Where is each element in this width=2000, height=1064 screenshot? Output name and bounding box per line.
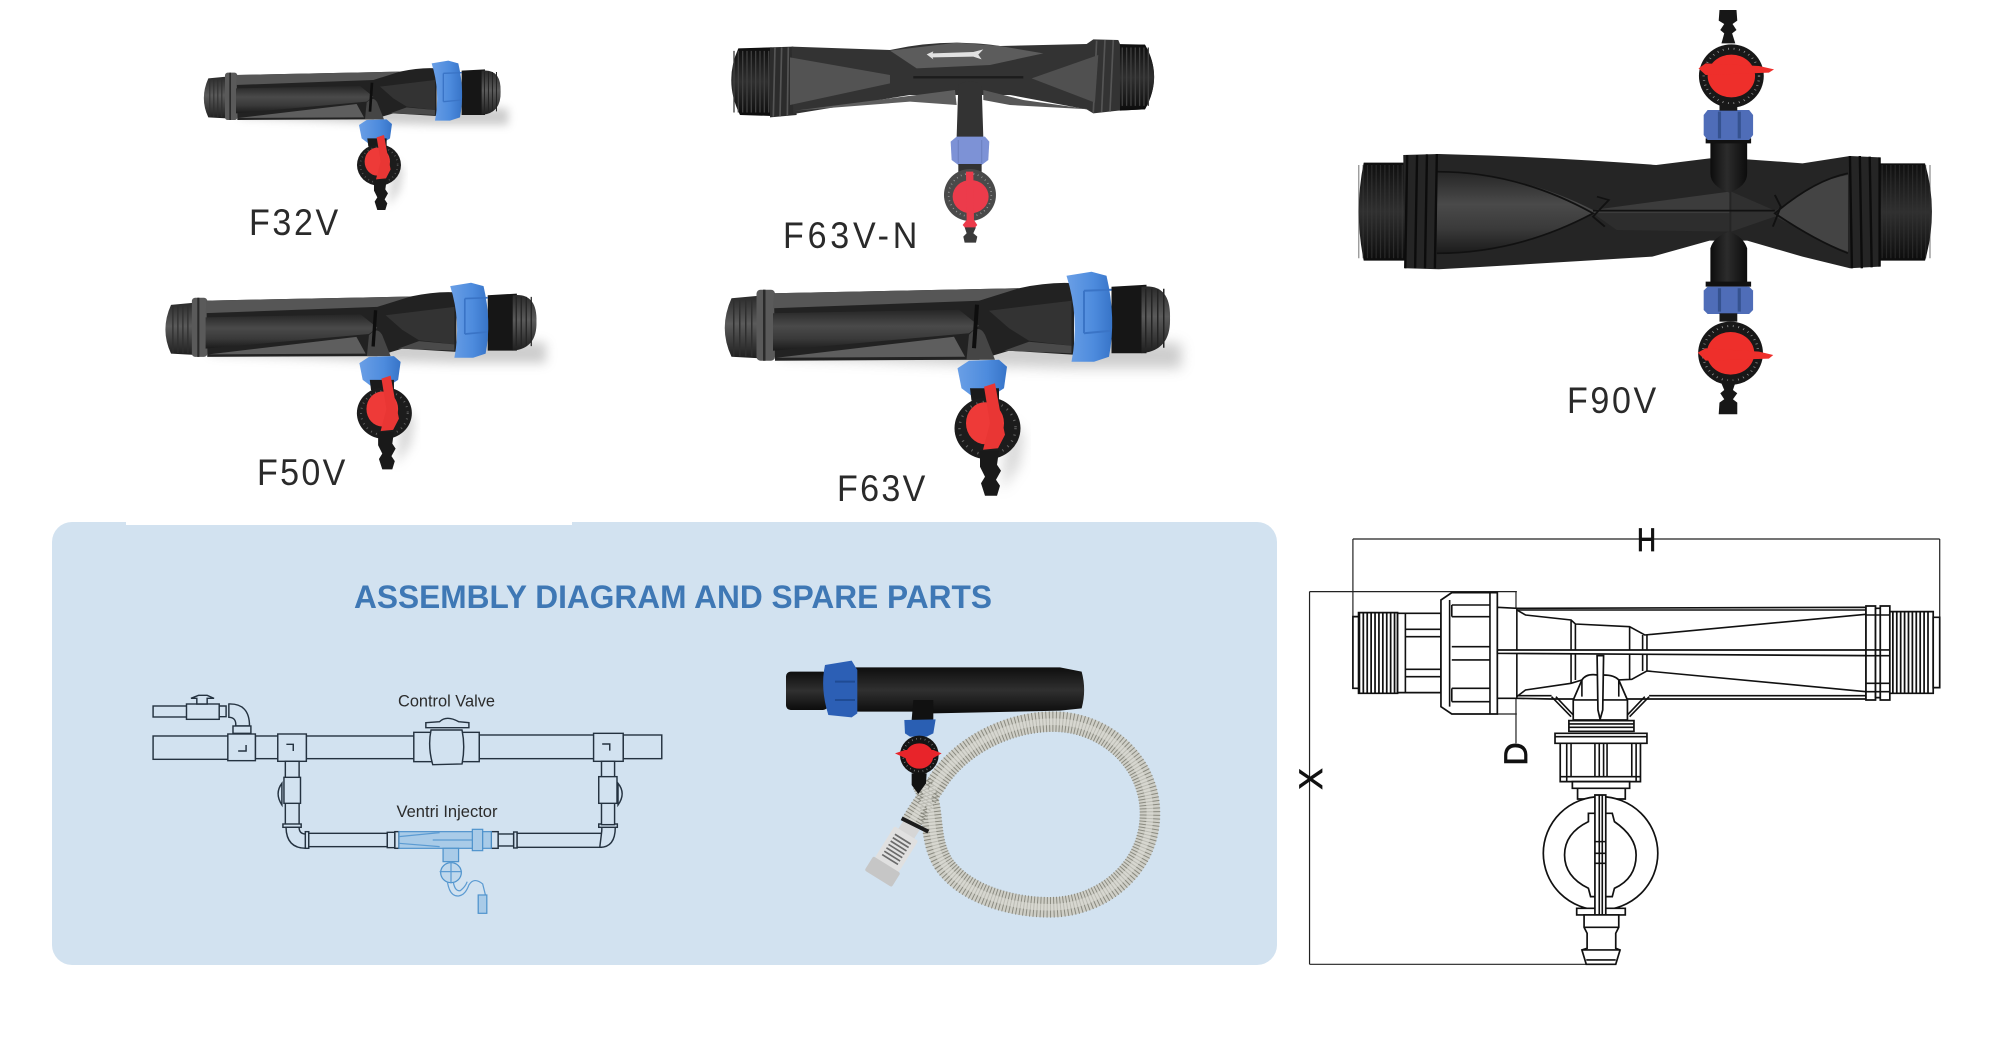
panel: assembly diagram and spare parts xyxy=(52,521,1277,965)
F90V injector photo xyxy=(1358,10,1932,414)
F90V label: F90V xyxy=(1567,380,1657,421)
dimension label X: X xyxy=(1293,768,1329,790)
F63V injector photo xyxy=(725,272,1182,496)
dimension label D: D xyxy=(1498,742,1534,766)
pipe installation diagram xyxy=(153,695,662,913)
body of injector xyxy=(1353,593,1940,799)
panel heading: ASSEMBLY DIAGRAM AND SPARE PARTS xyxy=(354,579,992,615)
blue highlighted injector xyxy=(399,832,473,848)
technical dimension drawing xyxy=(1310,539,1940,964)
F63V label: F63V xyxy=(837,468,926,509)
dimension lines xyxy=(1310,539,1940,964)
F50V label: F50V xyxy=(257,452,346,493)
label: ventri injector: Ventri Injector xyxy=(396,803,498,821)
strainer xyxy=(865,817,925,887)
dimension label H: H xyxy=(1637,522,1656,558)
valve and barb xyxy=(1543,795,1658,964)
label: control valve: Control Valve xyxy=(398,692,495,710)
injector with suction hose and strainer xyxy=(786,661,1150,907)
F63V-N injector photo xyxy=(731,39,1154,243)
F32V injector photo xyxy=(204,61,508,210)
F63V-N label: F63V-N xyxy=(783,215,917,256)
F32V label: F32V xyxy=(249,202,339,243)
F50V injector photo xyxy=(165,283,546,469)
